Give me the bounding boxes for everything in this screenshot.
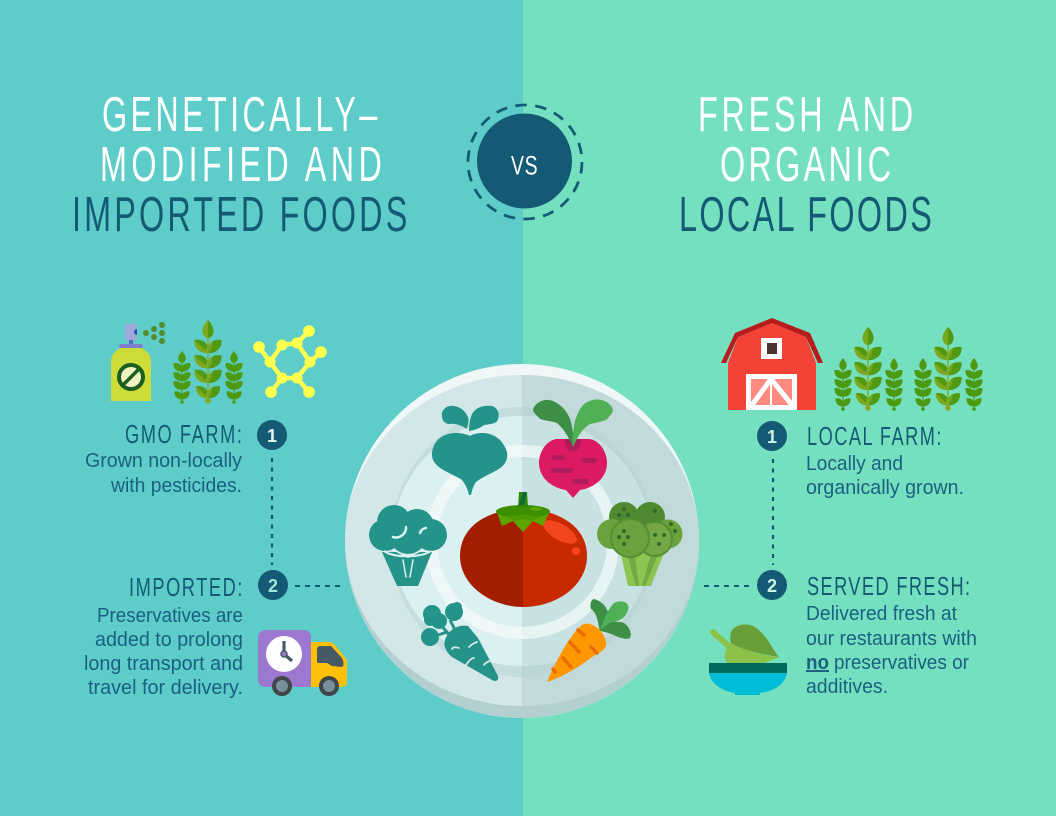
icon: tomato <box>460 492 587 607</box>
icon: teal broccoli <box>369 505 447 586</box>
title: left: IMPORTED FOODS <box>72 186 407 242</box>
text block: served fresh <box>806 572 977 698</box>
badge: left 1: 1 <box>267 426 277 446</box>
connector: left vertical dots <box>271 458 273 565</box>
text block: served fresh: no <box>806 652 829 674</box>
icon: teal carrot <box>421 602 498 681</box>
badge: left 1 <box>257 420 287 450</box>
badge: right 1: 1 <box>767 427 777 447</box>
title: right: FRESH AND <box>698 86 913 142</box>
text block: served fresh: our restaurants with <box>806 628 977 650</box>
text block: GMO farm: Grown non-locally <box>85 450 242 472</box>
text block: local farm: Locally and <box>806 453 903 475</box>
title: left: GENETICALLY– <box>102 86 378 142</box>
text block: local farm: organically grown. <box>806 477 964 499</box>
connector: left horizontal dashes <box>295 585 340 587</box>
title: left <box>72 86 407 242</box>
icon: spray can <box>111 322 165 401</box>
text block: local farm: LOCAL FARM: <box>807 422 941 451</box>
text block: served fresh: Delivered fresh at <box>806 603 957 625</box>
text block: imported: added to prolong <box>95 629 243 651</box>
text block: GMO farm: with pesticides. <box>110 475 242 497</box>
icon: right crop plants <box>834 327 983 411</box>
title: right: LOCAL FOODS <box>679 186 932 242</box>
connector: right horizontal dashes <box>704 585 750 587</box>
text block: imported: Preservatives are <box>97 605 243 627</box>
text block: served fresh: additives. <box>806 676 888 698</box>
icon: salad bowl <box>709 625 787 695</box>
badge: left 2: 2 <box>268 576 278 596</box>
icon: molecule <box>253 325 327 398</box>
text block: GMO farm: GMO FARM: <box>125 420 242 449</box>
badge: right 2: 2 <box>767 576 777 596</box>
vs badge <box>468 105 582 219</box>
vs badge: VS <box>511 150 538 180</box>
icon: orange carrot <box>547 599 631 682</box>
text block: served fresh: preservatives or <box>834 652 969 674</box>
badge: right 2 <box>757 570 787 600</box>
icon: left crop plants <box>173 320 243 404</box>
text block: GMO farm <box>85 420 242 497</box>
title: right: ORGANIC <box>720 136 891 192</box>
text block: imported: IMPORTED: <box>129 573 242 602</box>
text block: local farm <box>806 422 964 499</box>
panel: right background <box>523 0 1056 816</box>
icon: red barn <box>721 318 823 410</box>
title: right <box>679 86 932 242</box>
panel: left background <box>0 0 523 816</box>
title: left: MODIFIED AND <box>100 136 382 192</box>
text block: imported: travel for delivery. <box>88 677 243 699</box>
connector: right vertical dots <box>772 459 774 565</box>
icon: radish <box>533 400 613 498</box>
badge: left 2 <box>258 570 288 600</box>
text block: imported <box>84 573 243 699</box>
text block: imported: long transport and <box>84 653 243 675</box>
icon: delivery truck <box>258 630 347 696</box>
badge: right 1 <box>757 421 787 451</box>
icon: teal turnip <box>432 406 507 495</box>
text block: served fresh: SERVED FRESH: <box>807 572 970 601</box>
icon: green broccoli <box>597 502 682 586</box>
plate <box>345 364 699 718</box>
